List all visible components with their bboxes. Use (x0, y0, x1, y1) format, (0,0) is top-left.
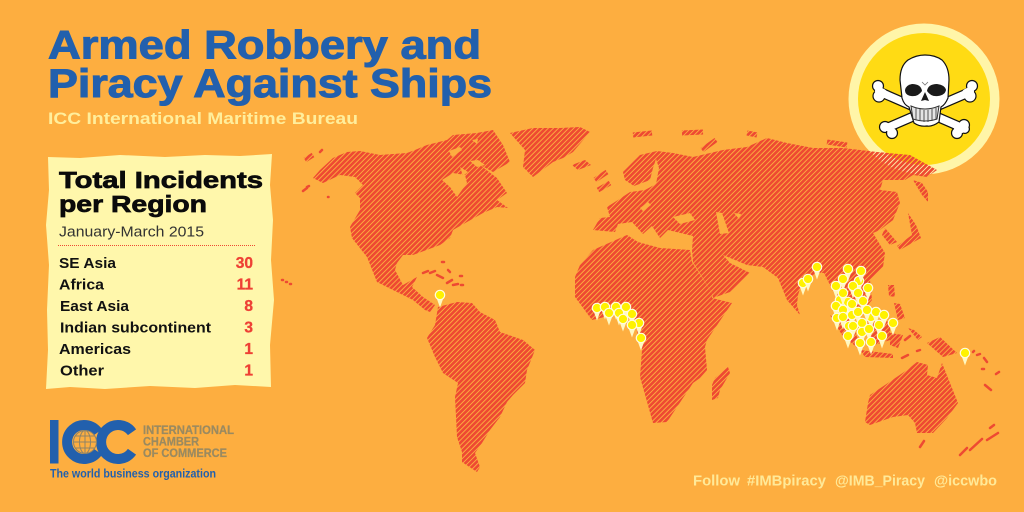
North America (313, 130, 510, 312)
social media footer: @IMB_Piracy (835, 474, 925, 490)
incident counts (236, 255, 253, 380)
social media footer: Follow (693, 474, 741, 490)
Iceland (572, 160, 591, 170)
incident counts: 1 (244, 362, 253, 380)
panel heading (59, 167, 263, 217)
date range: January-March 2015 (59, 224, 204, 240)
small islands (282, 150, 999, 455)
Black Sea and Caspian gaps (640, 202, 741, 234)
social media footer (693, 474, 997, 490)
arctic and Atlantic islands (305, 132, 847, 190)
title: Piracy Against Ships (48, 62, 492, 106)
incident pins (435, 262, 970, 366)
region list: Africa (59, 276, 105, 294)
region list: Other (60, 362, 104, 380)
panel heading: per Region (59, 191, 207, 217)
region list: East Asia (60, 298, 130, 315)
incident counts: 8 (244, 298, 253, 315)
pins: Africa (592, 302, 646, 350)
pin: Americas (435, 290, 445, 308)
pins: SE Asia and East Asia (831, 264, 898, 356)
region list (59, 255, 211, 380)
Hudson Bay and arctic gaps (442, 139, 485, 197)
panel heading: Total Incidents (59, 167, 263, 193)
title (48, 24, 492, 106)
world map (282, 127, 999, 472)
social media footer: @iccwbo (934, 474, 997, 490)
social media footer: #IMBpiracy (747, 474, 826, 490)
logo tagline: The world business organization (50, 468, 216, 480)
pin: Papua New Guinea (960, 348, 970, 366)
panel: total incidents per region (46, 154, 274, 389)
incident counts: 30 (236, 255, 253, 272)
Australia (865, 362, 958, 433)
incident counts: 3 (244, 320, 253, 336)
icon: globe (74, 430, 96, 454)
South America (427, 302, 535, 472)
ICC logo (50, 420, 234, 480)
panel background (46, 154, 274, 389)
region list: Indian subcontinent (60, 320, 211, 336)
logo wordmark: OF COMMERCE (143, 446, 227, 460)
logo wordmark (143, 423, 234, 460)
incident counts: 11 (237, 276, 253, 294)
region list: SE Asia (59, 255, 117, 272)
icon: crossbones (872, 80, 978, 138)
skull and crossbones badge (848, 24, 1000, 174)
logo wordmark: INTERNATIONAL (143, 423, 234, 437)
incident counts: 1 (244, 341, 253, 358)
Africa (575, 235, 732, 423)
Madagascar (712, 367, 730, 400)
icon: skull (900, 55, 949, 126)
Asia-Pacific islands (830, 180, 957, 358)
Greenland (510, 127, 590, 177)
pins: Indian subcontinent (798, 262, 822, 296)
logo wordmark: CHAMBER (143, 434, 199, 448)
subtitle: ICC International Maritime Bureau (48, 110, 358, 128)
Eurasia (593, 138, 937, 340)
region list: Americas (59, 341, 131, 358)
title: Armed Robbery and (48, 24, 481, 68)
